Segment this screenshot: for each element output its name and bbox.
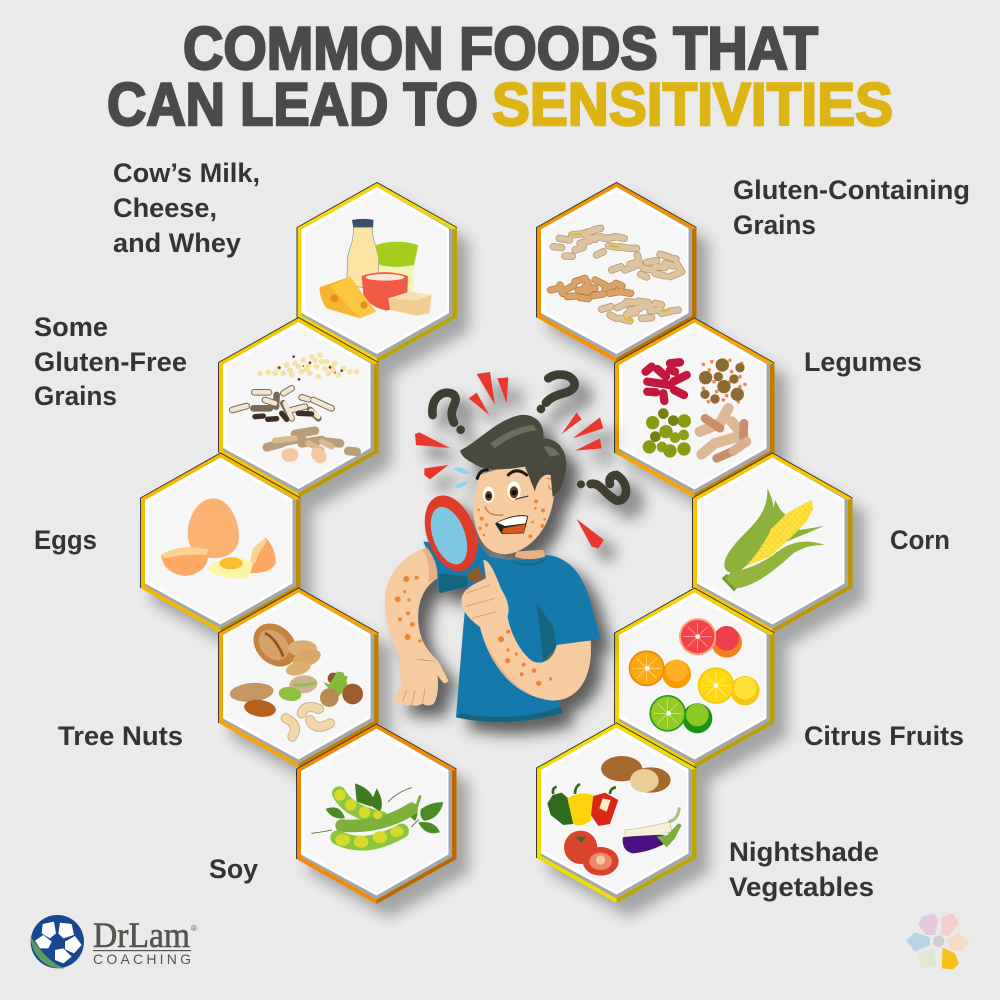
title — [107, 15, 893, 138]
logo: DrLam Coaching — [31, 915, 197, 968]
icon: tree nuts — [229, 615, 363, 737]
labels — [34, 158, 970, 902]
icon: milk, cheese and whey — [319, 219, 432, 318]
flower mark — [906, 913, 970, 969]
labels: Citrus Fruits — [804, 721, 964, 751]
logo wordmark: ® — [191, 924, 197, 933]
hexagon: citrus fruits — [614, 588, 774, 768]
labels: Corn — [890, 525, 950, 555]
labels: Soy — [209, 854, 258, 884]
labels: Legumes — [804, 347, 922, 377]
labels: and Whey — [113, 228, 241, 258]
icon: gluten-free grains — [232, 355, 357, 457]
title: CAN LEAD TO — [107, 71, 478, 138]
hexagon: corn — [692, 453, 852, 633]
hexagon: nightshade vegetables — [536, 723, 696, 903]
icon: corn — [722, 488, 825, 591]
icon: citrus fruits — [629, 618, 760, 733]
icon: legumes — [646, 360, 747, 458]
labels: Gluten-Containing — [733, 175, 970, 205]
logo wordmark: DrLam — [93, 915, 190, 955]
labels: Cheese, — [113, 193, 217, 223]
labels: Gluten-Free — [34, 347, 187, 377]
labels: Grains — [733, 210, 816, 240]
labels: Vegetables — [729, 872, 874, 902]
hexagon: gluten-containing grains — [536, 182, 696, 362]
hexagon: soy — [296, 724, 456, 904]
icon: gluten-containing grains — [551, 228, 682, 321]
logo wordmark: COACHING — [93, 951, 191, 967]
icon: nightshade vegetables — [547, 756, 682, 876]
labels: Some — [34, 312, 108, 342]
title: SENSITIVITIES — [492, 71, 893, 138]
labels: Eggs — [34, 525, 97, 555]
hexagon: tree nuts — [218, 588, 378, 768]
icon: soy beans — [312, 783, 443, 848]
labels: Grains — [34, 381, 117, 411]
hexagon: gluten-free grains — [218, 318, 378, 498]
labels: Tree Nuts — [58, 721, 183, 751]
labels: Cow’s Milk, — [113, 158, 260, 188]
labels: Nightshade — [729, 837, 879, 867]
hexagon: dairy — [297, 182, 457, 362]
logo mark — [31, 915, 84, 968]
title: COMMON FOODS THAT — [183, 15, 818, 82]
hexagon: eggs — [140, 453, 300, 633]
icon: eggs — [161, 498, 276, 579]
character: man inspecting rash with magnifying glass — [385, 372, 626, 722]
hexagon: legumes — [614, 318, 774, 498]
